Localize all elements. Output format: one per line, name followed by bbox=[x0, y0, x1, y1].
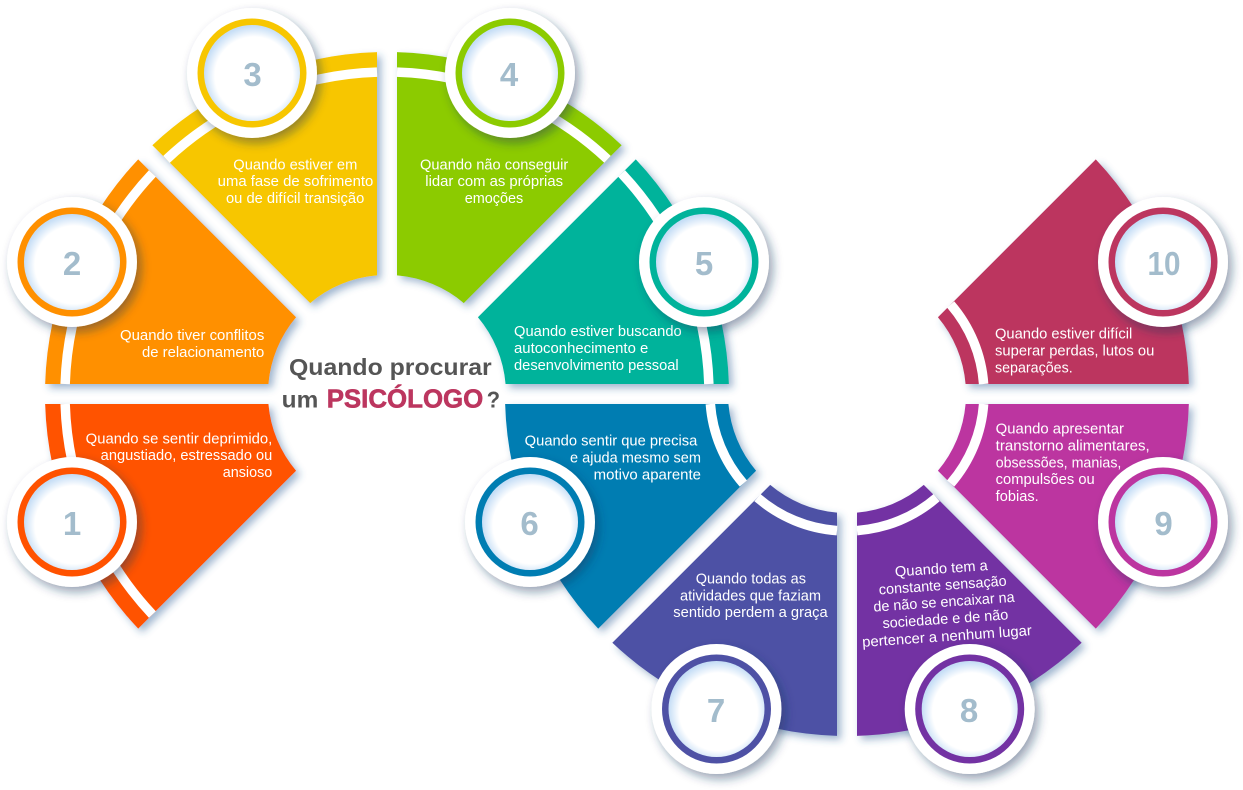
text: segment 7: atividades que faziam bbox=[680, 588, 821, 604]
text: segment 8: de não se encaixar na bbox=[873, 590, 1016, 616]
icon: number badge 8: 8 bbox=[960, 692, 978, 729]
icon: number badge 3 bbox=[187, 8, 317, 138]
wedge 8 bbox=[745, 465, 1082, 790]
wedge 9 bbox=[938, 404, 1189, 629]
text: segment 4: emoções bbox=[465, 191, 523, 207]
text: segment 4: Quando não conseguir bbox=[420, 157, 568, 173]
panel: segment 3 bbox=[152, 0, 489, 323]
panel: segment 4 bbox=[397, 8, 622, 303]
title: um bbox=[282, 387, 318, 413]
panel: segment 7 bbox=[612, 485, 837, 774]
text: segment 10: superar perdas, lutos ou bbox=[995, 343, 1154, 359]
icon: number badge 6 bbox=[465, 457, 595, 587]
wedge 7 bbox=[612, 485, 837, 736]
icon: number badge 3: 3 bbox=[243, 56, 262, 93]
text: segment 3 bbox=[218, 157, 373, 207]
text: segment 9: obsessões, manias, bbox=[996, 455, 1121, 471]
icon: number badge 1 bbox=[7, 457, 137, 587]
text: segment 6 bbox=[525, 433, 701, 483]
title: ? bbox=[487, 387, 500, 413]
icon: number badge 5 bbox=[639, 197, 769, 327]
icon: number badge 5: 5 bbox=[695, 245, 713, 282]
text: segment 3: uma fase de sofrimento bbox=[218, 174, 373, 190]
wedge 4 bbox=[397, 52, 622, 303]
icon: number badge 2: 2 bbox=[63, 245, 81, 282]
text: segment 6: e ajuda mesmo sem bbox=[570, 450, 701, 466]
panel: segment 5 bbox=[458, 159, 795, 496]
title: PSICÓLOGO bbox=[327, 384, 483, 414]
wedge 1 bbox=[0, 292, 316, 629]
title bbox=[282, 354, 500, 414]
panel: segment 9 bbox=[938, 404, 1228, 629]
wedge 3 bbox=[152, 0, 489, 323]
wedge 10 bbox=[918, 159, 1243, 496]
text: segment 10 bbox=[995, 326, 1154, 376]
text: segment 5 bbox=[514, 324, 682, 374]
text: segment 2: Quando tiver conflitos bbox=[120, 328, 264, 344]
icon: number badge 9: 9 bbox=[1154, 505, 1173, 542]
text: segment 6: motivo aparente bbox=[594, 467, 701, 483]
text: segment 1: ansioso bbox=[223, 465, 272, 481]
text: segment 8: pertencer a nenhum lugar bbox=[862, 623, 1033, 651]
icon: number badge 10: 10 bbox=[1148, 245, 1180, 282]
icon: number badge 7 bbox=[652, 644, 782, 774]
text: segment 3: Quando estiver em bbox=[233, 157, 357, 173]
text: segment 5: autoconhecimento e bbox=[514, 341, 648, 357]
text: segment 2: de relacionamento bbox=[142, 345, 264, 361]
text: segment 8: Quando tem a bbox=[894, 558, 989, 581]
text: segment 9: Quando apresentar bbox=[996, 421, 1124, 437]
icon: number badge 7: 7 bbox=[707, 692, 725, 729]
text: segment 7: sentido perdem a graça bbox=[673, 605, 829, 621]
text: segment 3: ou de difícil transição bbox=[226, 191, 364, 207]
text: segment 6: Quando sentir que precisa bbox=[525, 433, 698, 449]
icon: number badge 8 bbox=[905, 644, 1035, 774]
text: segment 4 bbox=[420, 157, 568, 207]
icon: number badge 6: 6 bbox=[520, 505, 539, 542]
text: segment 9: fobias. bbox=[996, 489, 1039, 505]
wedge 2 bbox=[45, 159, 296, 384]
text: segment 7: Quando todas as bbox=[696, 571, 806, 587]
text: segment 5: Quando estiver buscando bbox=[514, 324, 682, 340]
text: segment 1: angustiado, estressado ou bbox=[101, 448, 272, 464]
panel: segment 6 bbox=[439, 292, 776, 629]
icon: number badge 4: 4 bbox=[500, 56, 519, 93]
panel: segment 10 bbox=[918, 159, 1243, 496]
panel: segment 8 bbox=[745, 465, 1082, 790]
wedge 5 bbox=[458, 159, 795, 496]
text: segment 5: desenvolvimento pessoal bbox=[514, 358, 679, 374]
text: segment 9: compulsões ou bbox=[996, 472, 1095, 488]
text: segment 10: separações. bbox=[995, 360, 1073, 376]
icon: number badge 10 bbox=[1098, 197, 1228, 327]
title: Quando procurar bbox=[289, 354, 492, 380]
text: segment 8: constante sensação bbox=[878, 574, 1007, 598]
text: segment 4: lidar com as próprias bbox=[425, 174, 563, 190]
wedge 6 bbox=[439, 292, 776, 629]
icon: number badge 2 bbox=[7, 197, 137, 327]
text: segment 8 bbox=[862, 558, 1033, 651]
text: segment 7 bbox=[673, 571, 829, 621]
icon: number badge 9 bbox=[1098, 457, 1228, 587]
text: segment 1: Quando se sentir deprimido, bbox=[86, 431, 272, 447]
text: segment 9: transtorno alimentares, bbox=[996, 438, 1150, 454]
panel: segment 1 bbox=[0, 292, 316, 629]
text: segment 1 bbox=[86, 431, 272, 481]
text: segment 10: Quando estiver difícil bbox=[995, 326, 1132, 342]
panel: segment 2 bbox=[7, 159, 296, 384]
text: segment 9 bbox=[996, 421, 1150, 505]
icon: number badge 1: 1 bbox=[63, 505, 81, 542]
text: segment 2 bbox=[120, 328, 264, 361]
text: segment 8: sociedade e de não bbox=[882, 607, 1009, 632]
icon: number badge 4 bbox=[445, 8, 575, 138]
